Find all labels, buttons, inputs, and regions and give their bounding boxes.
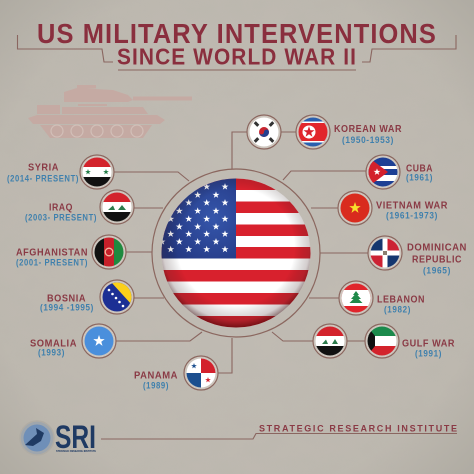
logo wordmark: SRI <box>55 419 96 455</box>
logo subtitle: STRATEGIC RESEARCH INSTITUTE <box>56 450 96 453</box>
logo: SRI <box>20 419 96 455</box>
label: Vietnam War: (1961-1973) <box>386 210 438 220</box>
label: Iraq <box>25 202 97 222</box>
flag: Lebanon <box>339 281 373 315</box>
logo emblem <box>20 421 54 455</box>
icon: tank silhouette <box>28 85 192 138</box>
label: Syria <box>7 162 79 184</box>
label: Syria: (2014- PRESENT) <box>7 174 79 184</box>
label: Lebanon <box>377 294 425 314</box>
label: Gulf War <box>402 338 455 358</box>
flag: Dominican Republic <box>368 236 402 270</box>
label: Somalia: SOMALIA <box>30 338 77 350</box>
central US flag globe <box>152 169 320 337</box>
label: Dominican Republic: (1965) <box>423 266 451 276</box>
flag: Vietnam <box>338 191 372 225</box>
outer ring <box>152 169 320 337</box>
flag: North Korea <box>296 115 330 149</box>
label: Cuba: (1961) <box>406 172 433 182</box>
label: Korean War: KOREAN WAR <box>334 124 402 135</box>
flag: Cuba <box>366 155 400 189</box>
title line one: US MILITARY INTERVENTIONS <box>37 18 437 49</box>
label: Cuba <box>406 164 433 182</box>
label: Panama: (1989) <box>143 380 169 390</box>
flag: Iraq (Gulf War) <box>313 324 347 358</box>
footer organisation name: STRATEGIC RESEARCH INSTITUTE <box>259 424 457 434</box>
label: Iraq: (2003- PRESENT) <box>25 212 97 222</box>
label: Bosnia: (1994 -1995) <box>40 302 94 312</box>
label: Dominican Republic: DOMINICAN <box>407 242 467 254</box>
footer organisation name <box>101 424 457 439</box>
label: Vietnam War: VIETNAM WAR <box>376 200 448 212</box>
flag: Somalia <box>82 324 116 358</box>
label: Dominican Republic <box>407 242 467 276</box>
label: Somalia: (1993) <box>38 348 65 358</box>
flag: Panama <box>184 356 218 390</box>
label: Afghanistan: AFGHANISTAN <box>16 248 88 258</box>
label: Dominican Republic: REPUBLIC <box>412 254 462 266</box>
flag: Kuwait <box>365 324 399 358</box>
flag: Iraq <box>100 190 134 224</box>
label: Gulf War: (1991) <box>415 348 442 358</box>
title <box>18 18 456 70</box>
label: Gulf War: GULF WAR <box>402 338 455 350</box>
label: Iraq: IRAQ <box>49 202 73 214</box>
label: Syria: SYRIA <box>28 162 59 174</box>
label: Panama <box>134 370 178 390</box>
label: Panama: PANAMA <box>134 370 178 382</box>
flag: South Korea <box>247 115 281 149</box>
label: Korean War <box>334 124 402 145</box>
label: Korean War: (1950-1953) <box>342 135 394 145</box>
label: Bosnia: BOSNIA <box>47 294 86 304</box>
flag: Syria <box>80 155 114 189</box>
label: Afghanistan: (2001- PRESENT) <box>16 258 88 268</box>
title line two: SINCE WORLD WAR II <box>117 44 357 70</box>
label: Vietnam War <box>376 200 448 220</box>
flag <box>158 178 312 328</box>
label: Cuba: CUBA <box>406 164 433 174</box>
flag: Afghanistan <box>92 235 126 269</box>
label: Lebanon: (1982) <box>384 304 411 314</box>
label: Lebanon: LEBANON <box>377 294 425 306</box>
label: Afghanistan <box>16 248 88 268</box>
label: Bosnia <box>40 294 94 312</box>
flag: Bosnia <box>100 280 134 314</box>
title bracket <box>18 35 456 70</box>
connector lines <box>114 132 368 373</box>
label: Somalia <box>30 338 77 358</box>
